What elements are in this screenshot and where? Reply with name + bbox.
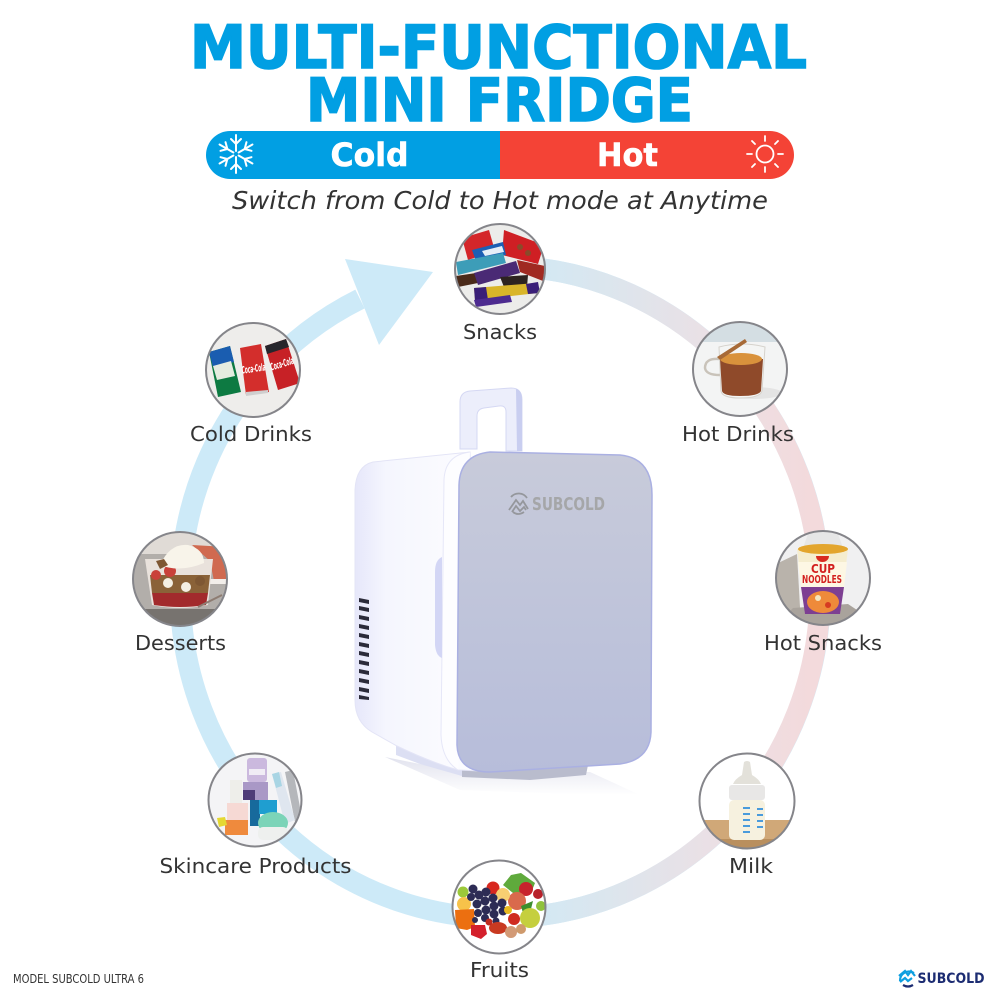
label: Hot Snacks <box>764 631 882 655</box>
photo: dessert glass <box>133 532 227 626</box>
label: Hot Drinks <box>682 422 794 446</box>
circular arrow ring <box>180 259 820 918</box>
cold and hot mode pill: Cold <box>330 136 408 174</box>
door logo <box>509 493 605 515</box>
label: Snacks <box>463 320 537 344</box>
panel: hot snacks <box>764 531 882 655</box>
photo: fruits and vegetables <box>454 873 544 939</box>
fridge reflection <box>385 757 640 795</box>
fridge body side <box>355 452 480 771</box>
photo: cup noodles <box>776 531 870 625</box>
label: Skincare Products <box>160 854 352 878</box>
panel: cold drinks <box>190 323 312 446</box>
ventilation slots <box>359 598 369 700</box>
title: MULTI-FUNCTIONAL <box>190 13 807 83</box>
model text: MODEL SUBCOLD ULTRA 6 <box>13 972 144 986</box>
photo: baby bottle <box>704 758 790 848</box>
icon: sun <box>747 136 783 172</box>
subtitle: Switch from Cold to Hot mode at Anytime <box>232 186 768 215</box>
photo: hot drink glass mug <box>693 322 787 416</box>
fridge feet <box>396 742 588 780</box>
side handle recess <box>435 557 442 658</box>
photo: skincare products <box>208 753 302 847</box>
photo: soda cans: Coca-Cola <box>241 362 266 377</box>
mini fridge <box>355 388 652 795</box>
photo border <box>452 860 546 954</box>
panel: skincare products <box>160 753 352 878</box>
photo border <box>693 322 787 416</box>
fridge handle <box>460 388 522 451</box>
door frame highlight <box>441 452 470 770</box>
label: Cold Drinks <box>190 422 312 446</box>
panel: snacks <box>455 224 545 344</box>
brand logo: SUBCOLD <box>918 971 984 987</box>
photo border <box>776 531 870 625</box>
title <box>190 13 807 136</box>
label: Milk <box>729 854 773 878</box>
photo border <box>208 754 302 846</box>
panel: hot drinks <box>682 322 794 446</box>
label: Fruits <box>470 958 529 982</box>
arrow head <box>345 259 433 345</box>
photo: soda cans: Coca-Cola <box>269 356 295 373</box>
photo border <box>455 224 545 314</box>
door logo: SUBCOLD <box>532 494 605 515</box>
photo border <box>133 532 227 626</box>
photo border <box>206 323 300 417</box>
icon: snowflake <box>217 135 255 173</box>
label: Desserts <box>135 631 226 655</box>
cold and hot mode pill: Hot <box>597 136 658 174</box>
icon: mountain logo <box>899 971 915 986</box>
panel: fruits <box>452 860 546 982</box>
photo: cup noodles: CUP <box>811 562 835 576</box>
cold and hot mode pill <box>206 131 794 179</box>
photo: soda cans <box>206 323 300 417</box>
photo: cup noodles: NOODLES <box>802 573 842 586</box>
photo: snack bars <box>455 224 545 314</box>
panel: desserts <box>133 532 227 655</box>
panel: milk <box>699 753 795 878</box>
fridge door <box>457 452 652 772</box>
photo border <box>700 754 794 848</box>
title: MINI FRIDGE <box>306 66 693 136</box>
